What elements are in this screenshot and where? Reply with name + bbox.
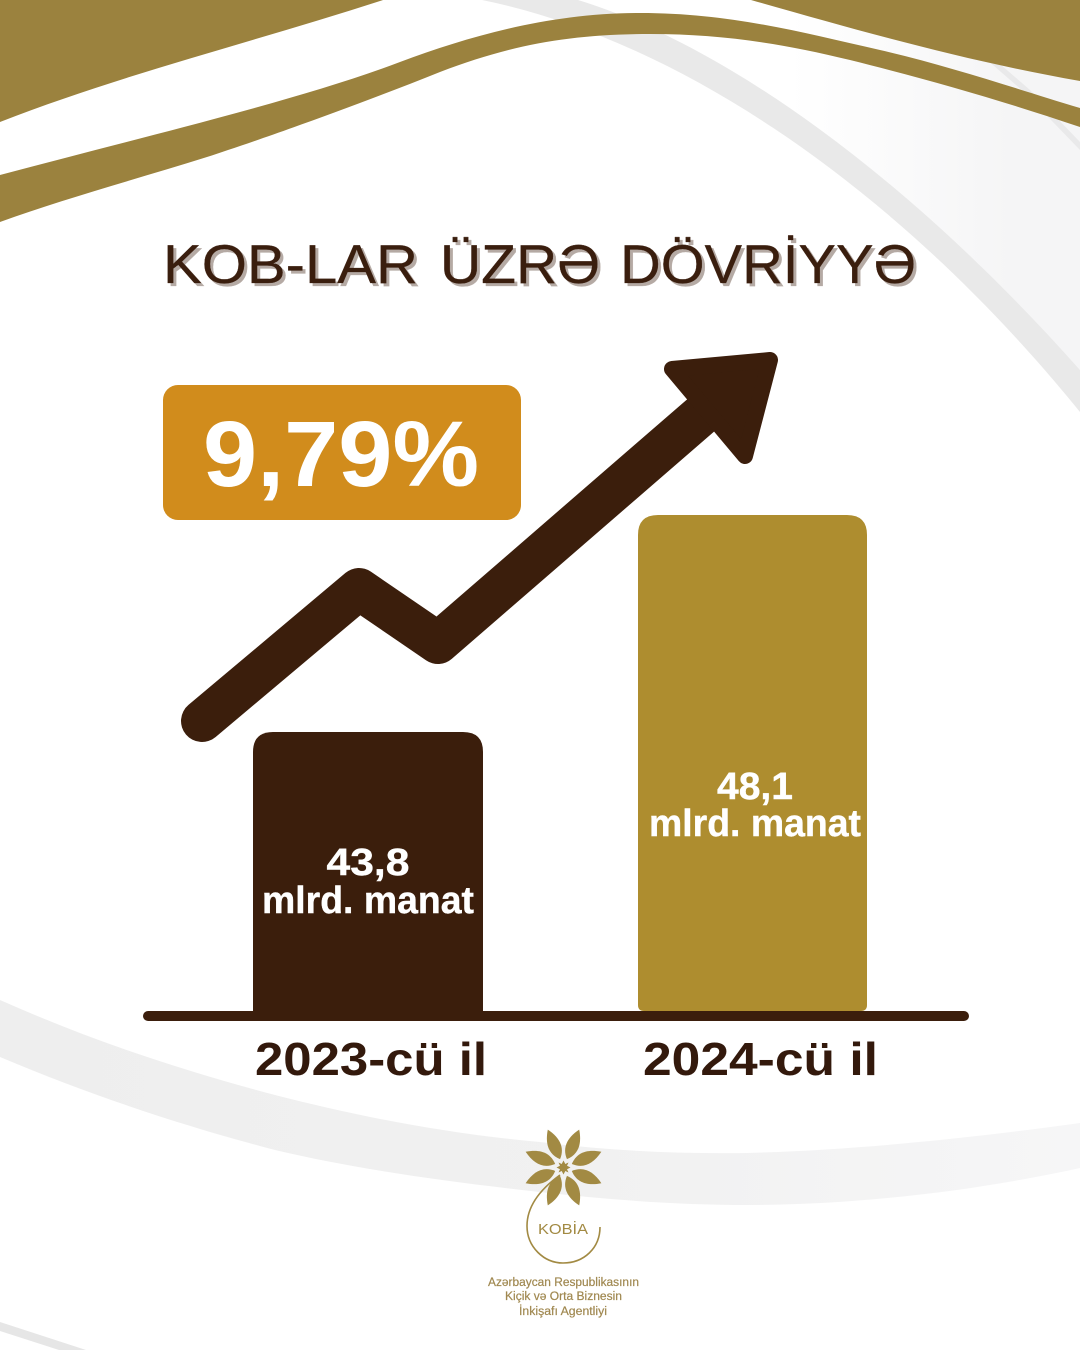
background swoosh: faint streak	[978, 52, 1080, 150]
agency name	[488, 1277, 639, 1318]
logo: KOBIA	[488, 1127, 639, 1318]
background swoosh: top right light area	[578, 0, 1080, 370]
agency name: Kiçik və Orta Biznesin	[505, 1291, 622, 1303]
axis label: 2024: 2024-cü il	[643, 1033, 878, 1085]
agency name: İnkişafı Agentliyi	[519, 1305, 607, 1318]
bar: 2024: mlrd. manat	[649, 803, 861, 845]
growth arrow	[202, 360, 770, 721]
top right gold shape	[751, 0, 1080, 81]
top left gold shape	[0, 0, 383, 122]
chart baseline	[143, 1011, 969, 1021]
bar: 2024	[638, 515, 867, 1011]
background swoosh: grey arc	[482, 0, 1080, 412]
agency name: Azərbaycan Respublikasının	[488, 1277, 639, 1289]
percentage badge	[163, 385, 521, 520]
bar: 2024: 48,1	[717, 766, 793, 808]
bar: 2023: 43,8	[326, 842, 410, 884]
title: DÖVRİYYƏ	[620, 233, 916, 295]
title: KOB-LAR	[163, 233, 418, 295]
background swoosh: lower grey band	[0, 1000, 1080, 1205]
percentage badge: 9,79%	[203, 402, 479, 506]
logo wordmark: KOBİA	[538, 1220, 588, 1238]
axis label: 2023: 2023-cü il	[255, 1033, 487, 1085]
bar: 2023	[253, 732, 483, 1015]
icon: flower	[523, 1127, 604, 1208]
background swoosh: bottom left corner	[0, 1322, 86, 1350]
bar: 2023: mlrd. manat	[262, 880, 474, 922]
icon: teardrop ring	[527, 1175, 600, 1263]
title	[163, 233, 916, 295]
top gold ribbon	[0, 13, 1080, 222]
title: ÜZRƏ	[440, 233, 600, 295]
